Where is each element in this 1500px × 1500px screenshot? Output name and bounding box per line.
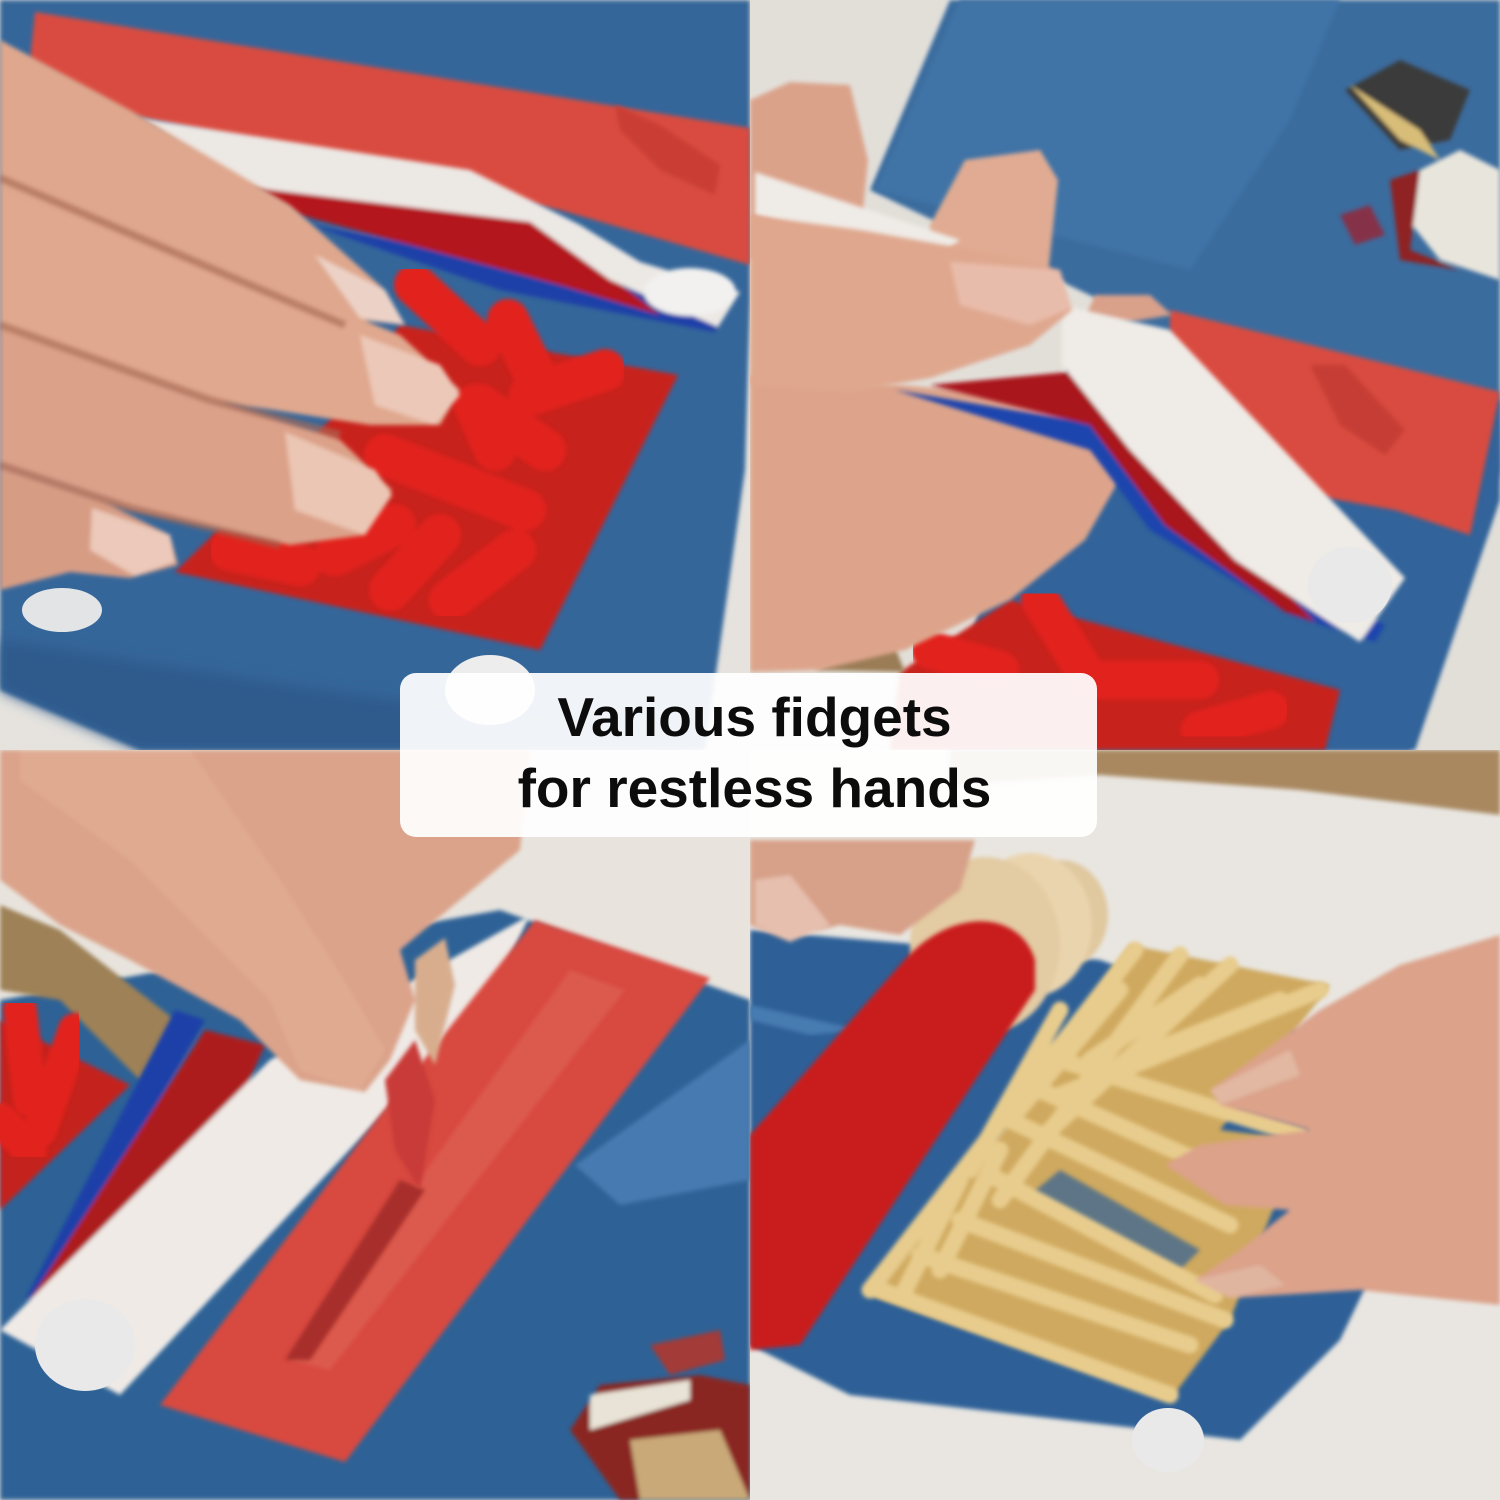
caption: Various fidgets bbox=[557, 686, 952, 748]
snap buttons bbox=[22, 588, 102, 632]
embroidered figure bbox=[1340, 60, 1500, 280]
denim bag bbox=[870, 0, 1500, 750]
red zipper bbox=[160, 920, 710, 1462]
zipper opening bbox=[285, 1180, 425, 1360]
bag loop bbox=[1410, 1085, 1475, 1120]
hand with four fingers bbox=[0, 40, 460, 590]
red zipper bbox=[1170, 310, 1500, 535]
zipper pull bbox=[615, 105, 720, 195]
hand pinching zipper bbox=[0, 750, 530, 1092]
snap button bbox=[35, 1346, 108, 1391]
caption: for restless hands bbox=[518, 757, 991, 819]
zipper pull bbox=[1310, 365, 1405, 455]
zipper teeth band bbox=[290, 970, 625, 1370]
tan fabric bbox=[816, 650, 906, 673]
denim bag bbox=[0, 910, 750, 1500]
embroidered figure bbox=[570, 1330, 750, 1500]
ribbons bbox=[0, 915, 530, 1395]
panel: zipper fidget photo bbox=[0, 750, 750, 1500]
snap button bbox=[1132, 1408, 1204, 1472]
denim pocket bbox=[575, 1040, 750, 1205]
denim bag bbox=[750, 927, 1367, 1444]
panel: ribbon fidget photo bbox=[750, 0, 1500, 750]
denim bag bbox=[0, 0, 750, 750]
zipper pull bbox=[385, 1040, 435, 1190]
denim pocket bbox=[750, 1005, 860, 1035]
caption bbox=[400, 673, 1097, 837]
brown table edge bbox=[950, 750, 1500, 815]
ribbons bbox=[140, 118, 740, 332]
snap button bbox=[1376, 594, 1391, 615]
thumb bbox=[750, 215, 1072, 392]
top fingers bbox=[750, 840, 975, 942]
ribbons bbox=[755, 172, 1405, 642]
red zipper bbox=[30, 12, 750, 265]
right hand bbox=[1165, 935, 1500, 1305]
panel: chenille fidget photo bbox=[0, 0, 750, 750]
denim gaps between strands bbox=[1030, 1170, 1200, 1270]
denim pocket bbox=[876, 0, 1341, 194]
tan fabric bbox=[0, 905, 175, 1080]
chenille patch bbox=[890, 600, 1340, 750]
gold rope strands bbox=[870, 950, 1320, 1395]
chenille loops bbox=[230, 285, 605, 600]
gold rope fringe base bbox=[870, 945, 1330, 1400]
wooden rings bbox=[910, 853, 1108, 1033]
panel: gold rope fidget photo bbox=[750, 750, 1500, 1500]
chenille patch bbox=[175, 325, 678, 650]
red strap bbox=[750, 921, 1035, 1350]
hand: rear fingers and palm bbox=[750, 82, 1172, 672]
chenille patch bbox=[0, 1020, 130, 1210]
